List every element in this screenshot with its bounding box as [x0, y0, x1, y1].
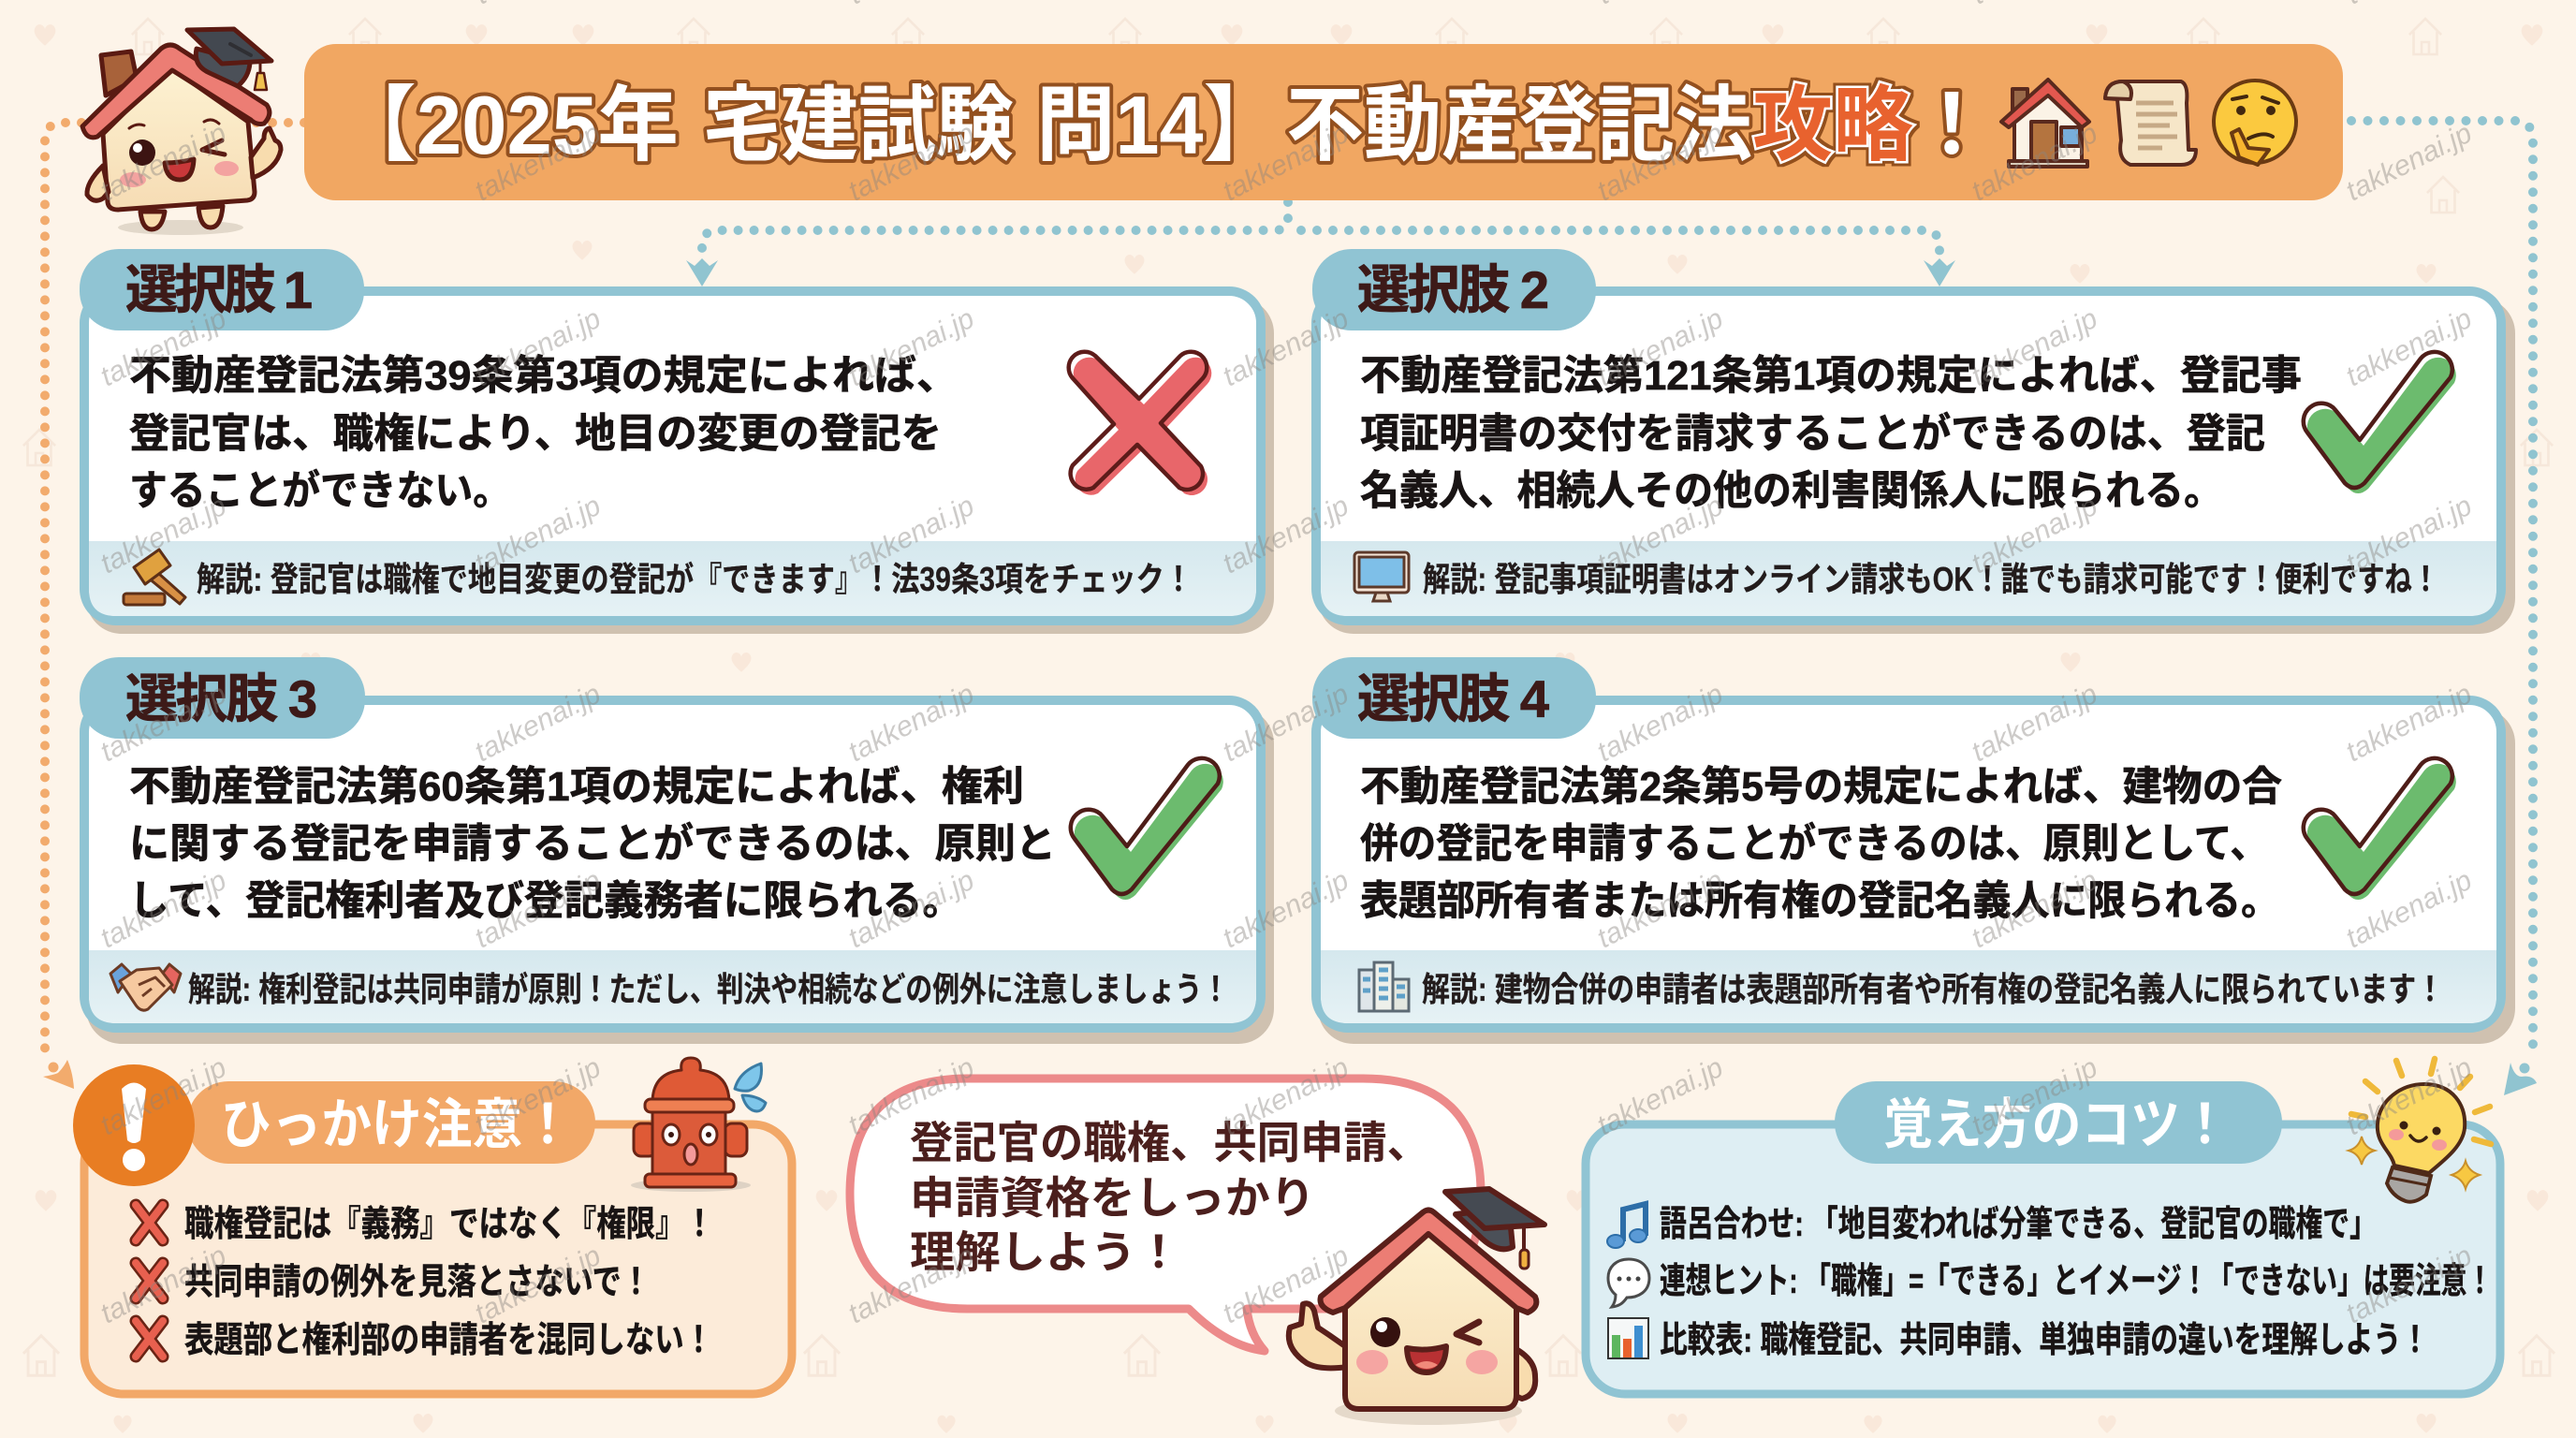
watermark grid: takkenai.jp: [1967, 302, 2102, 392]
icon: scroll: [2105, 81, 2196, 165]
icon: lightbulb character: [2349, 1059, 2491, 1202]
tip 1: wordplay: [1607, 1204, 2377, 1248]
panel: choice 4: [1312, 657, 2515, 1044]
tab: choice 1: [80, 249, 364, 330]
tab label: 選択肢 2: [1357, 260, 1549, 319]
statement text: [1360, 354, 2302, 514]
speech text: 理解しよう！: [910, 1227, 1181, 1277]
panel: trap warnings: [73, 1058, 792, 1394]
tab: choice 3: [80, 657, 365, 739]
icon: green check: [2304, 758, 2456, 900]
statement text: [129, 354, 959, 514]
watermark grid: takkenai.jp: [843, 1051, 979, 1141]
panel heading: ひっかけ注意！: [221, 1094, 573, 1155]
watermark grid: takkenai.jp: [2341, 1240, 2477, 1329]
watermark grid: takkenai.jp: [2341, 117, 2477, 207]
icon: handshake: [110, 964, 181, 1010]
watermark grid: takkenai.jp: [1218, 490, 1354, 580]
statement text: 項証明書の交付を請求することができるのは、登記: [1360, 412, 2265, 457]
tab label: 選択肢 4: [1357, 669, 1549, 728]
icon: monitor: [1354, 552, 1409, 601]
icon: exclamation circle: [73, 1064, 195, 1186]
title exclamation: ！: [1910, 79, 1993, 171]
title bar: [304, 44, 2343, 200]
icon: red cross: [1069, 352, 1211, 495]
statement text: [129, 765, 1056, 924]
statement text: 名義人、相続人その他の利害関係人に限られる。: [1360, 469, 2223, 514]
tab: choice 4: [1312, 657, 1596, 739]
watermark grid: takkenai.jp: [470, 864, 606, 954]
watermark grid: takkenai.jp: [470, 302, 606, 392]
icon: thinking face: [2214, 81, 2296, 165]
tab label: 選択肢 3: [125, 669, 317, 728]
watermark grid: takkenai.jp: [1967, 117, 2102, 207]
warning item 2: 共同申請の例外を見落とさないで！: [184, 1263, 651, 1302]
icon: house: [2001, 80, 2089, 167]
panel: choice 2: [1312, 249, 2515, 634]
tip 1: wordplay: 語呂合わせ: 「地目変われば分筆できる、登記官の職権で」: [1660, 1205, 2377, 1244]
panel: memory tips: [1586, 1059, 2500, 1394]
watermark grid: takkenai.jp: [470, 1051, 606, 1141]
statement text: 不動産登記法第2条第5号の規定によれば、建物の合: [1360, 765, 2282, 810]
statement text: に関する登記を申請することができるのは、原則と: [129, 822, 1056, 867]
watermark grid: takkenai.jp: [1218, 302, 1354, 392]
watermark grid: takkenai.jp: [1218, 1240, 1354, 1329]
watermark grid: takkenai.jp: [95, 490, 231, 580]
icon: green check: [2304, 352, 2456, 493]
callout: speech bubble: [850, 1078, 1481, 1351]
header pill: [187, 1081, 595, 1164]
watermark grid: takkenai.jp: [843, 678, 979, 768]
title text: real estate registration act: 不動産登記法: [1286, 79, 1752, 171]
explanation text: 解説: 権利登記は共同申請が原則！ただし、判決や相続などの例外に注意しましょう！: [188, 970, 1229, 1008]
statement text: 不動産登記法第60条第1項の規定によれば、権利: [129, 765, 1024, 810]
watermark grid: takkenai.jp: [470, 117, 606, 207]
statement text: 不動産登記法第39条第3項の規定によれば、: [129, 354, 959, 399]
title text: 宅建試験: [703, 79, 1014, 171]
icon: gavel: [124, 550, 185, 605]
watermark grid: takkenai.jp: [843, 490, 979, 580]
watermark grid: takkenai.jp: [2341, 864, 2477, 954]
watermark grid: takkenai.jp: [1592, 864, 1728, 954]
mascot: house character giving thumbs up: [1289, 1189, 1544, 1425]
tab: choice 2: [1312, 249, 1596, 330]
speech text: [910, 1118, 1430, 1277]
watermark grid: takkenai.jp: [1218, 1051, 1354, 1141]
watermark grid: takkenai.jp: [95, 678, 231, 768]
watermark grid: takkenai.jp: [2341, 1051, 2477, 1141]
mascot: house with graduation cap waving: [82, 29, 281, 235]
icon: green check: [1071, 758, 1223, 900]
watermark grid: takkenai.jp: [1967, 490, 2102, 580]
explanation text: 解説: 登記官は職権で地目変更の登記が『できます』！法39条3項をチェック！: [197, 560, 1193, 598]
watermark grid: takkenai.jp: [2341, 678, 2477, 768]
watermark grid: takkenai.jp: [1218, 117, 1354, 207]
watermark grid: takkenai.jp: [843, 302, 979, 392]
watermark grid: takkenai.jp: [1592, 678, 1728, 768]
title text: [335, 79, 1282, 171]
watermark grid: takkenai.jp: [843, 117, 979, 207]
arrow: blue dotted path from title to tips panel: [2351, 121, 2537, 1095]
watermark grid: takkenai.jp: [843, 864, 979, 954]
speech text: 登記官の職権、共同申請、: [910, 1118, 1430, 1167]
watermark grid: takkenai.jp: [95, 1051, 231, 1141]
statement text: 登記官は、職権により、地目の変更の登記を: [129, 412, 942, 457]
statement text: [1360, 765, 2282, 924]
watermark grid: takkenai.jp: [95, 864, 231, 954]
watermark grid: takkenai.jp: [1592, 117, 1728, 207]
watermark grid: takkenai.jp: [95, 117, 231, 207]
watermark grid: takkenai.jp: [1967, 1051, 2102, 1141]
statement text: 併の登記を申請することができるのは、原則として、: [1360, 822, 2268, 867]
watermark grid: takkenai.jp: [95, 302, 231, 392]
title emphasis: 攻略: [1752, 79, 1913, 171]
header pill: [1835, 1081, 2282, 1164]
speech text: 申請資格をしっかり: [910, 1173, 1315, 1223]
watermark grid: takkenai.jp: [1218, 678, 1354, 768]
watermark grid: takkenai.jp: [2341, 490, 2477, 580]
warning item 1: 職権登記は『義務』ではなく『権限』！: [184, 1205, 714, 1244]
watermark grid: takkenai.jp: [1967, 678, 2102, 768]
watermark grid: takkenai.jp: [470, 490, 606, 580]
statement text: することができない。: [129, 469, 511, 514]
panel: choice 1: [80, 249, 1274, 634]
watermark grid: takkenai.jp: [843, 1240, 979, 1329]
watermark grid: takkenai.jp: [1218, 864, 1354, 954]
icon: building: [1359, 962, 1409, 1011]
icon: hydrant character: [631, 1058, 766, 1192]
watermark grid: takkenai.jp: [95, 1240, 231, 1329]
arrow: orange dotted path from mascot to warning panel: [43, 123, 304, 1089]
watermark grid: takkenai.jp: [1967, 864, 2102, 954]
title text: 【2025年: [335, 79, 679, 171]
panel: choice 3: [80, 657, 1274, 1044]
watermark grid: takkenai.jp: [2341, 302, 2477, 392]
arrow: blue dotted branches from title to choices 1 and 2: [686, 202, 1955, 286]
statement text: 表題部所有者または所有権の登記名義人に限られる。: [1360, 879, 2279, 924]
tab label: 選択肢 1: [125, 260, 313, 319]
title text: 問14】: [1036, 79, 1282, 171]
warning item 3: 表題部と権利部の申請者を混同しない！: [184, 1321, 713, 1360]
statement text: して、登記権利者及び登記義務者に限られる。: [129, 879, 962, 924]
watermark grid: takkenai.jp: [470, 678, 606, 768]
watermark grid: takkenai.jp: [1592, 490, 1728, 580]
statement text: 不動産登記法第121条第1項の規定によれば、登記事: [1360, 354, 2302, 399]
watermark grid: takkenai.jp: [470, 1240, 606, 1329]
watermark grid: takkenai.jp: [1592, 1051, 1728, 1141]
watermark grid: takkenai.jp: [1592, 302, 1728, 392]
panel heading: 覚え方のコツ！: [1883, 1094, 2230, 1155]
